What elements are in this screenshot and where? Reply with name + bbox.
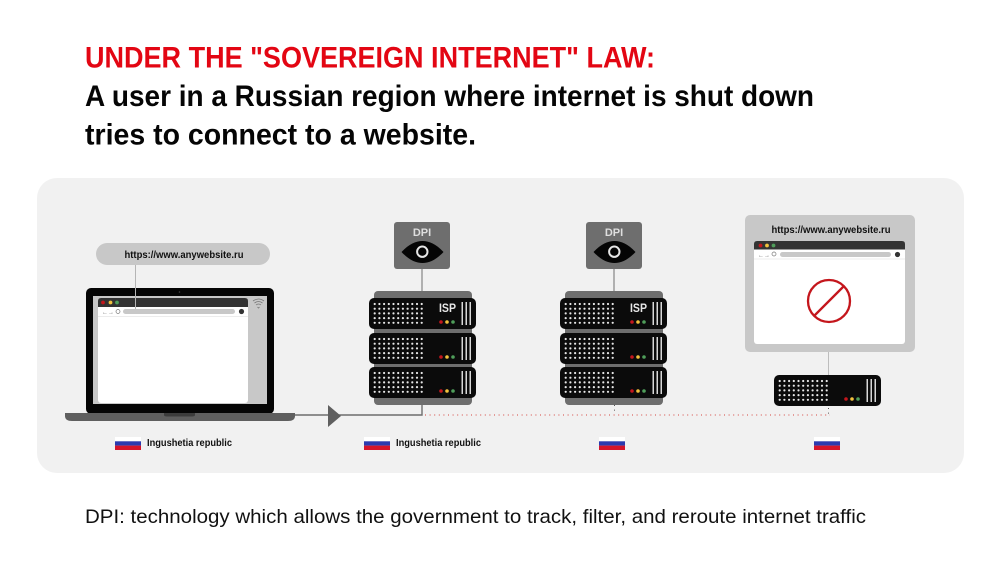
website server: [774, 375, 881, 406]
ISP server stack 1: [369, 291, 476, 405]
title: tries to connect to a website.: [85, 118, 476, 152]
website window: [745, 215, 915, 352]
flag and label: ISP: Ingushetia republic: [396, 438, 481, 449]
website window: ←→: [758, 253, 770, 259]
browser window: ←→: [102, 310, 114, 316]
URL bubble: https://www.anywebsite.ru: [124, 249, 244, 261]
flag and label: laptop: [115, 437, 232, 450]
flag 3: [599, 437, 625, 450]
panel: network diagram: [37, 178, 964, 473]
flag and label: laptop: Ingushetia republic: [147, 438, 232, 449]
URL bubble: [96, 243, 270, 265]
connector 2: [613, 269, 615, 292]
icon: wifi: [253, 299, 264, 308]
title: A user in a Russian region where internet is shut down: [85, 80, 814, 113]
connection line with arrow: [295, 404, 422, 427]
dotted red connection: [425, 405, 830, 415]
ISP server stack 2: [560, 291, 667, 405]
ISP server stack 1: ISP: [439, 303, 456, 315]
title: UNDER THE "SOVEREIGN INTERNET" LAW:: [85, 42, 655, 74]
flag 4: [814, 437, 840, 450]
DPI box 1: [394, 222, 450, 269]
icon: blocked sign: [808, 280, 850, 322]
footnote: DPI: technology which allows the government to track, filter, and reroute internet traffic: [85, 506, 866, 528]
connector 1: [421, 269, 423, 292]
browser window: [98, 298, 248, 403]
flag and label: ISP: [364, 437, 481, 450]
ISP server stack 2: ISP: [630, 303, 647, 315]
laptop: [65, 265, 295, 421]
website window: https://www.anywebsite.ru: [772, 224, 890, 236]
connector 3: [828, 352, 830, 375]
DPI box 2: [586, 222, 642, 269]
title: [85, 42, 814, 152]
